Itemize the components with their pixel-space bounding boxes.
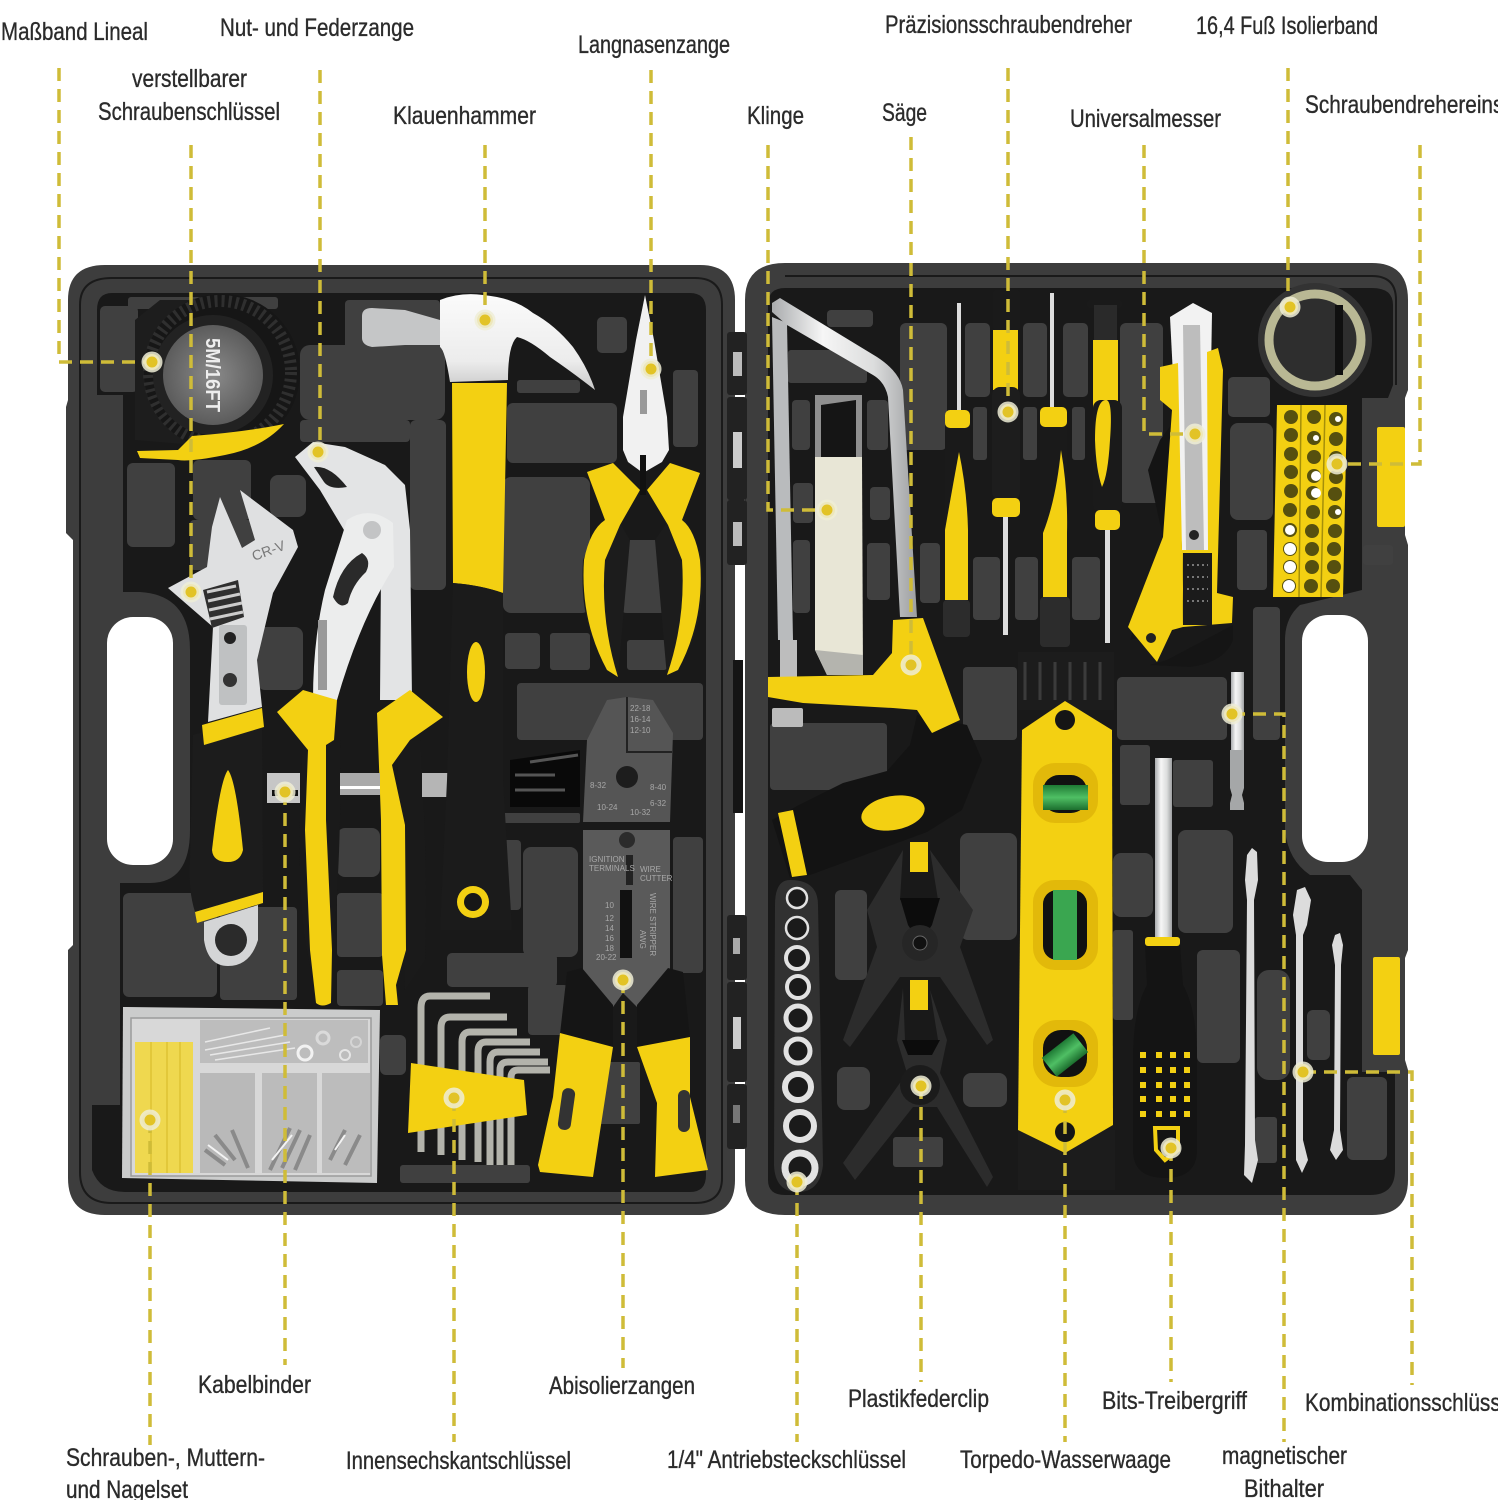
icon: hex key set — [421, 996, 550, 1165]
icon: tape measure — [135, 294, 300, 460]
icon: wire stripper: 18 — [605, 944, 614, 953]
icon: blade pack — [815, 395, 863, 675]
icon: screw and nail box — [122, 1007, 380, 1183]
icon: wire stripper — [538, 697, 708, 1177]
icon: wire stripper: 20-22 — [596, 953, 617, 962]
label: Universalmesser: Universalmesser — [1070, 105, 1221, 133]
label: Präzisionsschraubendreher: Präzisionsschraubendreher — [885, 11, 1132, 39]
icon: tongue and groove pliers — [277, 442, 443, 1006]
icon: wire stripper: WIRE — [640, 865, 661, 874]
icon: wire stripper: 22-18 — [630, 704, 651, 713]
label: Schrauben-, Muttern- und Nagelset: Schrauben-, Muttern- — [66, 1444, 265, 1472]
label: magnetischer Bithalter — [1222, 1442, 1347, 1500]
icon: magnetic bit holder — [1230, 672, 1244, 810]
icon: wire stripper: 6-32 — [650, 799, 667, 808]
label: Bits-Treibergriff: Bits-Treibergriff — [1102, 1387, 1247, 1415]
label: 1/4" Antriebsteckschlüssel: 1/4" Antriebsteckschlüssel — [667, 1446, 906, 1474]
icon: long nose pliers — [582, 295, 703, 677]
label: Langnasenzange: Langnasenzange — [578, 31, 730, 59]
label: Klinge: Klinge — [747, 102, 804, 130]
label: Kabelbinder: Kabelbinder — [198, 1371, 311, 1399]
icon: adjustable wrench — [168, 490, 298, 966]
label: Klauenhammer: Klauenhammer — [393, 102, 536, 130]
label: verstellbarer Schraubenschlüssel — [98, 65, 280, 126]
icon: wire stripper: 10-32 — [630, 808, 651, 817]
icon: claw hammer — [362, 294, 595, 930]
icon: wire stripper: 8-32 — [590, 781, 607, 790]
label: Schrauben-, Muttern- und Nagelset — [66, 1444, 265, 1500]
icon: wire stripper: AWG — [638, 930, 647, 949]
icon: wire stripper: 10-24 — [597, 803, 618, 812]
label: Säge: Säge — [882, 99, 927, 127]
label: Maßband Lineal: Maßband Lineal — [1, 18, 148, 46]
icon: wire stripper: 14 — [605, 924, 614, 933]
icon: wire stripper: IGNITION — [589, 855, 625, 864]
icon: wire stripper: TERMINALS — [589, 864, 635, 873]
label: Abisolierzangen: Abisolierzangen — [549, 1372, 695, 1400]
label: Innensechskantschlüssel: Innensechskantschlüssel — [346, 1447, 571, 1475]
panel: left case half — [66, 265, 735, 1215]
icon: plastic spring clips — [843, 842, 993, 1187]
icon: tape measure: 5M/16FT — [201, 338, 223, 412]
icon: adjustable wrench: CR-V — [250, 537, 288, 564]
icon: wire stripper: CUTTER — [640, 874, 673, 883]
icon: torpedo level — [1018, 652, 1115, 1190]
icon: precision screwdrivers — [943, 290, 1122, 647]
label: 16,4 Fuß Isolierband: 16,4 Fuß Isolierband — [1196, 12, 1378, 40]
icon: wire stripper: 12-10 — [630, 726, 651, 735]
icon: hex key holder — [408, 1063, 527, 1133]
icon: insulating tape — [1258, 283, 1372, 397]
icon: combination wrenches — [1244, 848, 1343, 1183]
icon: bit driver handle — [1133, 758, 1197, 1178]
icon: hacksaw — [768, 298, 982, 878]
icon: wire stripper: 16 — [605, 934, 614, 943]
icon: cable ties — [267, 750, 580, 807]
icon: wire stripper: 12 — [605, 914, 614, 923]
panel: right case half — [745, 263, 1408, 1215]
icon: hinges — [727, 332, 747, 1149]
icon: wire stripper: WIRE STRIPPER — [648, 893, 657, 956]
marker dots — [142, 299, 1345, 1190]
icon: screwdriver bits — [1273, 405, 1347, 597]
icon: wire stripper: 10 — [605, 901, 614, 910]
label: magnetischer Bithalter: magnetischer — [1222, 1442, 1347, 1470]
label: Torpedo-Wasserwaage: Torpedo-Wasserwaage — [960, 1446, 1171, 1474]
icon: wire stripper: 8-40 — [650, 783, 667, 792]
icon: socket set — [774, 880, 823, 1192]
icon: wire stripper: 16-14 — [630, 715, 651, 724]
label: Plastikfederclip: Plastikfederclip — [848, 1385, 989, 1413]
icon: latches — [1373, 427, 1405, 1055]
icon: utility knife — [1128, 303, 1233, 667]
label: verstellbarer Schraubenschlüssel: Schraubenschlüssel — [98, 98, 280, 126]
label: Nut- und Federzange: Nut- und Federzange — [220, 14, 414, 42]
label: verstellbarer Schraubenschlüssel: verstellbarer — [132, 65, 247, 93]
